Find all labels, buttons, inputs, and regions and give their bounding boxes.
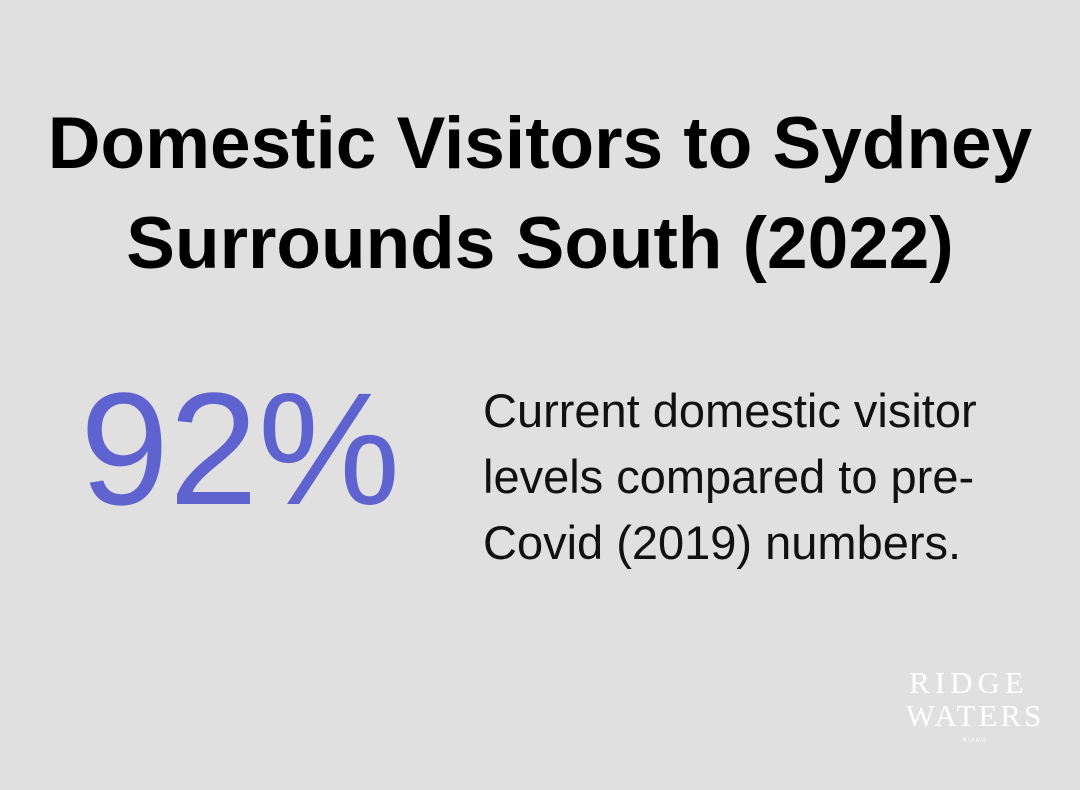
title: Surrounds South (2022) [126,203,954,284]
logo: Ridge Waters Kiama: RIDGE [909,665,1029,700]
title [48,103,1032,284]
big stat: 92%: 92% [80,359,400,538]
description text: levels compared to pre- [483,450,974,503]
logo: Ridge Waters Kiama: WATERS [906,698,1044,733]
title: Domestic Visitors to Sydney [48,103,1032,184]
description text: Current domestic visitor [483,384,977,437]
description text: Covid (2019) numbers. [483,516,961,569]
logo: Ridge Waters Kiama: KIAMA [963,738,987,744]
logo: Ridge Waters Kiama [906,665,1044,744]
description text [483,384,977,569]
